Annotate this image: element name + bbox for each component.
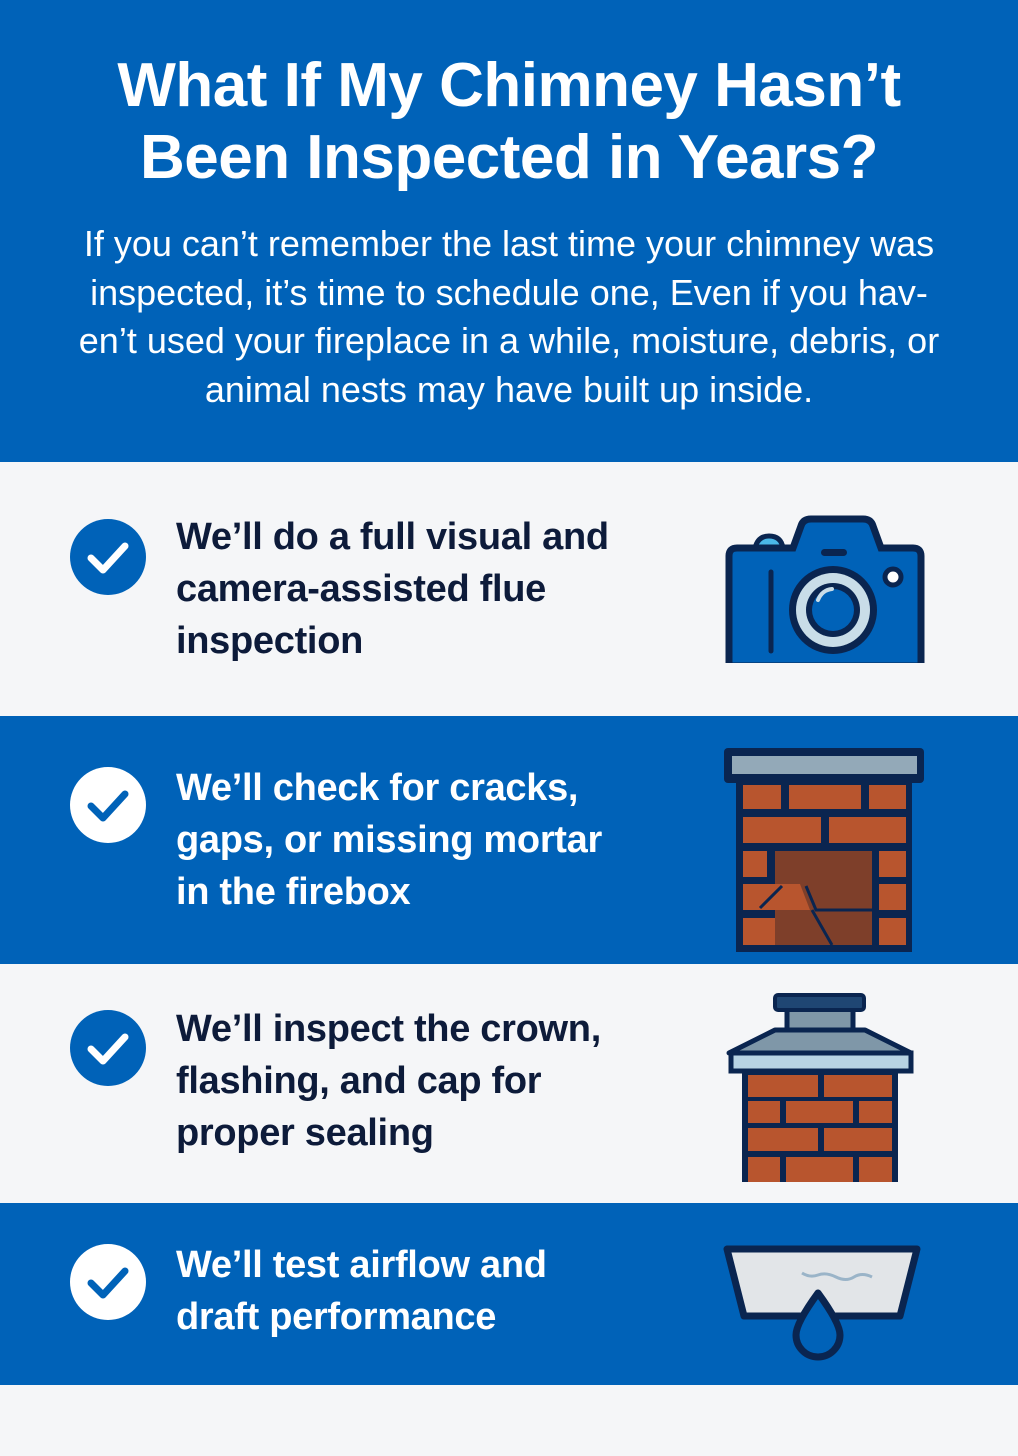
item 2 text: in the firebox: [176, 871, 410, 913]
item 4 text: draft performance: [176, 1296, 496, 1338]
title: What If My Chimney Hasn’t: [117, 51, 901, 120]
item 4 text: We’ll test airflow and: [176, 1244, 547, 1286]
item 4 text: [176, 1244, 547, 1338]
icon: cracked firebox bricks: [724, 748, 924, 952]
check icon 3: [70, 1010, 146, 1086]
item 3 text: [176, 1008, 601, 1154]
subtitle text: en’t used your fireplace in a while, moisture, debris, or: [79, 320, 939, 361]
item 3 text: proper sealing: [176, 1112, 434, 1154]
icon: camera: [726, 516, 924, 663]
item 2 text: We’ll check for cracks,: [176, 767, 578, 809]
item 3 text: We’ll inspect the crown,: [176, 1008, 601, 1050]
check icon 2: [70, 767, 146, 843]
item 1 text: [176, 516, 609, 662]
title: Been Inspected in Years?: [140, 123, 878, 192]
item 1 text: We’ll do a full visual and: [176, 516, 609, 558]
title: [117, 51, 901, 192]
check icon 4: [70, 1244, 146, 1320]
icon: gutter with water drop: [724, 1246, 920, 1360]
subtitle text: inspected, it’s time to schedule one, Even if you hav-: [90, 272, 928, 312]
item 2 text: gaps, or missing mortar: [176, 819, 602, 861]
item 1 text: inspection: [176, 620, 363, 662]
item 3 text: flashing, and cap for: [176, 1060, 541, 1102]
item 1 text: camera-assisted flue: [176, 568, 546, 610]
icon: chimney crown and cap: [726, 993, 914, 1182]
item 2 text: [176, 767, 602, 913]
subtitle text: animal nests may have built up inside.: [205, 368, 813, 410]
subtitle text: [79, 223, 939, 410]
check icon 1: [70, 519, 146, 595]
subtitle text: If you can’t remember the last time your chimney was: [84, 223, 934, 264]
